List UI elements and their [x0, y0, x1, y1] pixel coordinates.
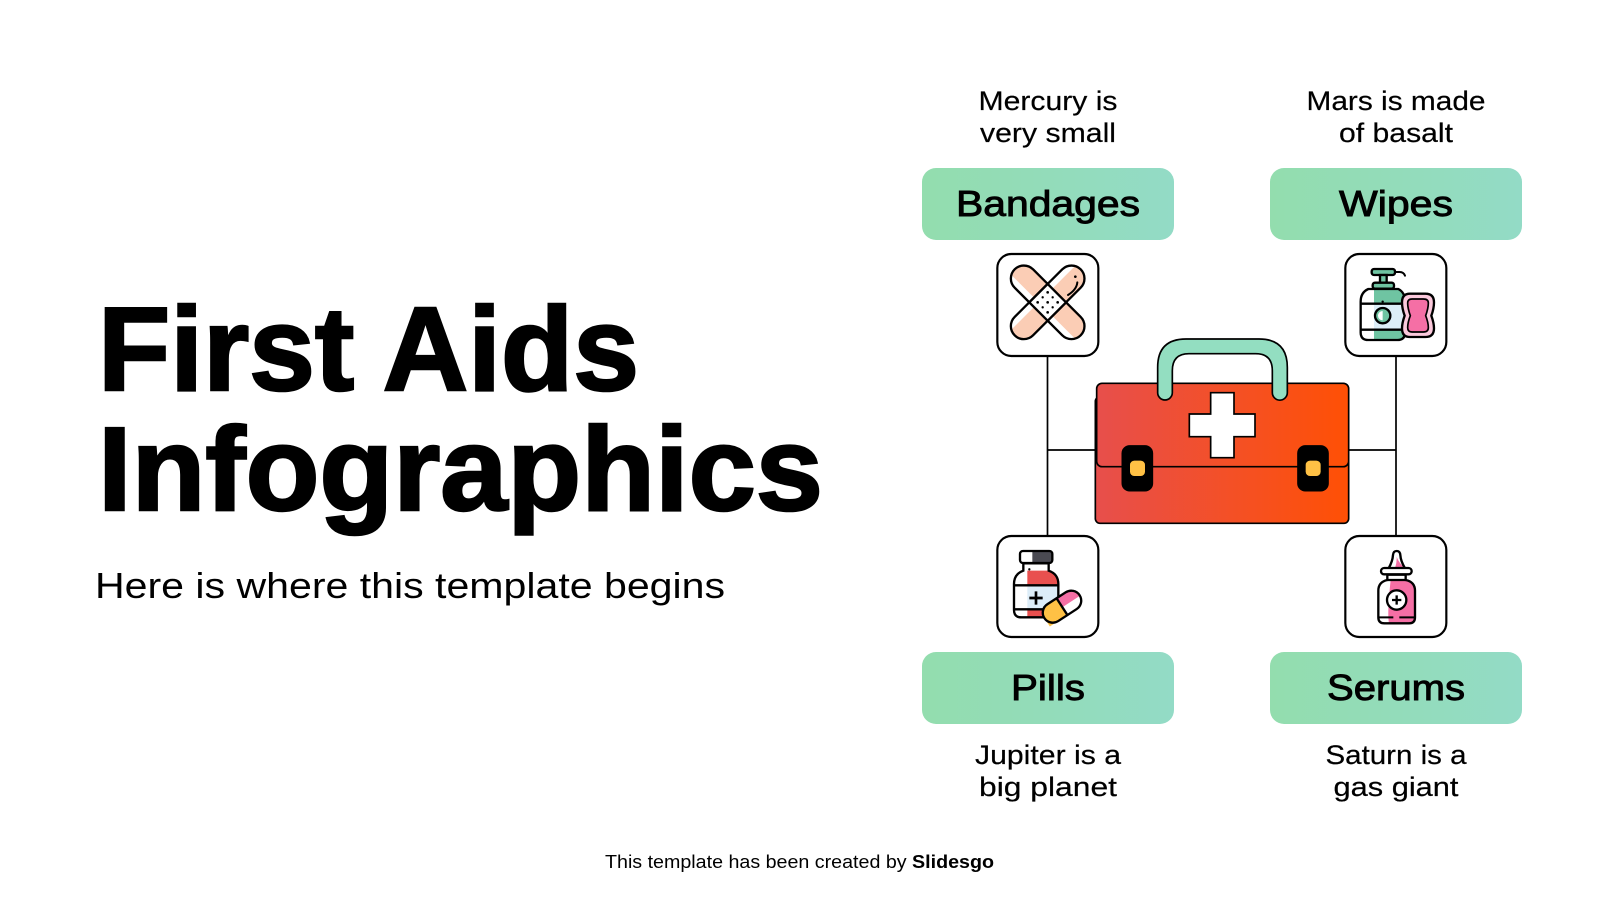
text: Mars: Mars is made [1306, 86, 1486, 116]
kit lid [1097, 383, 1349, 467]
text: Saturn: gas giant [1334, 772, 1459, 802]
text: Saturn [1326, 740, 1468, 802]
right latch [1298, 446, 1328, 491]
icon: wipes [1345, 254, 1446, 356]
footer credit: This template has been created by Slidesgo [605, 852, 994, 872]
title: First Aids [98, 283, 639, 416]
icon: first aid kit [1095, 339, 1349, 523]
text: Mercury: Mercury is [978, 86, 1118, 116]
text: Jupiter: big planet [979, 772, 1118, 802]
text: Jupiter: Jupiter is a [975, 740, 1122, 770]
title: Infographics [98, 403, 823, 536]
label: Serums: Serums [1327, 667, 1465, 708]
label: Pills: Pills [1011, 667, 1085, 708]
icon: bandages [997, 254, 1098, 356]
title [98, 283, 823, 536]
icon: serum [1345, 536, 1446, 637]
icon: pills [997, 536, 1098, 637]
text: Saturn: Saturn is a [1326, 740, 1468, 770]
kit body [1095, 397, 1349, 523]
kit handle [1158, 339, 1287, 400]
text: Mercury: very small [980, 118, 1116, 148]
label: Wipes [1270, 168, 1522, 240]
text: Mercury [978, 86, 1118, 148]
label: Wipes: Wipes [1339, 183, 1453, 224]
kit cross [1189, 393, 1255, 458]
text: Mars: of basalt [1339, 118, 1454, 148]
text: Jupiter [975, 740, 1122, 802]
left latch [1122, 446, 1152, 491]
text: Mars [1306, 86, 1486, 148]
label: Pills [922, 652, 1174, 724]
label: Bandages: Bandages [956, 183, 1140, 224]
label: Serums [1270, 652, 1522, 724]
label: Bandages [922, 168, 1174, 240]
subtitle: Here is where this template begins [95, 565, 725, 606]
connector lines [1048, 356, 1396, 537]
